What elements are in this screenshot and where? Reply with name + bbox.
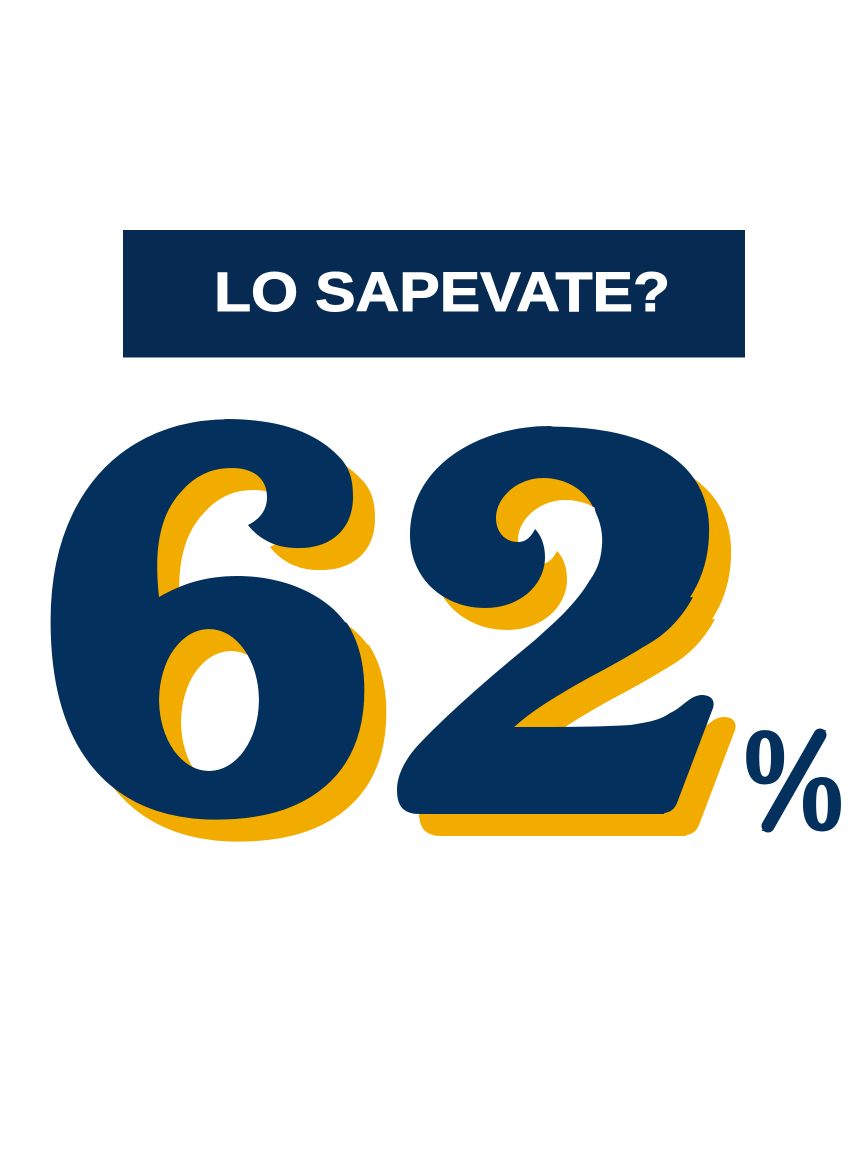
percent sign: % — [735, 697, 852, 861]
number shadow: 6 — [58, 317, 398, 954]
number shadow: 2 — [422, 327, 760, 951]
infographic canvas — [50, 230, 841, 842]
heading banner — [123, 230, 745, 358]
number: 6 — [36, 295, 376, 932]
heading banner: LO SAPEVATE? — [214, 261, 670, 323]
number shadow — [113, 466, 736, 842]
number — [50, 419, 714, 820]
number: 2 — [400, 305, 738, 929]
statistic: 62 percent — [50, 419, 841, 842]
